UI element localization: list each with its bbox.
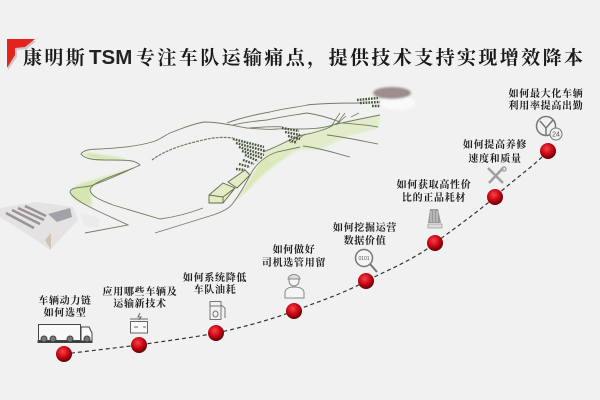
warehouse right <box>373 87 415 110</box>
step 5: data <box>333 221 397 272</box>
step 5: data: 如何挖掘运营 <box>333 221 397 234</box>
step 5: data: 数据价值 <box>344 234 386 247</box>
warehouse left <box>0 202 100 250</box>
icon: truck <box>38 324 92 342</box>
step 2: new technology: 运输新技术 <box>113 297 167 310</box>
dot 4 <box>286 303 302 319</box>
step 2: new technology: 应用哪些车辆及 <box>103 285 177 298</box>
step 7: maintenance: 如何提高养修 <box>463 138 527 151</box>
step 4: drivers <box>262 243 326 298</box>
logo mark <box>7 39 36 70</box>
truck in landscape <box>209 170 250 203</box>
green road shading <box>70 115 380 206</box>
icon: wrench and screwdriver <box>488 167 506 183</box>
step 1: powertrain: 如何选型 <box>44 306 86 319</box>
icon: 24-hour clock: 24 <box>552 132 560 138</box>
dot 8 <box>540 143 556 159</box>
step 8: utilization: 利用率提高出勤 <box>509 99 583 112</box>
icon: driver <box>285 274 304 298</box>
icon: magnifier: 0101 <box>358 256 370 262</box>
step 7: maintenance <box>463 138 527 183</box>
tree clusters <box>233 98 380 170</box>
step 3: fuel: 车队油耗 <box>194 283 236 296</box>
dashed route <box>64 151 548 354</box>
step 6: parts: 比的正品耗材 <box>402 191 466 204</box>
step 6: parts <box>397 178 471 228</box>
step 1: powertrain: 车辆动力链 <box>38 294 92 307</box>
dot 6 <box>427 235 443 251</box>
dot 1 <box>56 346 72 362</box>
landscape: winding road and hills <box>70 103 380 233</box>
icon: fuel pump <box>210 302 225 320</box>
step 3: fuel <box>183 271 247 320</box>
step 3: fuel: 如何系统降低 <box>183 271 247 284</box>
dot 2 <box>131 337 147 353</box>
dot 7 <box>487 189 503 205</box>
step 6: parts: 如何获取高性价 <box>397 178 471 191</box>
road edges <box>70 122 340 233</box>
step 7: maintenance: 速度和质量 <box>468 152 522 165</box>
title: 康明斯 <box>23 46 87 69</box>
step 1: powertrain <box>38 294 92 342</box>
step 8: utilization: 如何最大化车辆 <box>509 87 583 100</box>
step 4: drivers: 司机选管用留 <box>262 256 326 269</box>
step 2: new technology <box>103 285 177 333</box>
dot 3 <box>208 325 224 341</box>
step 4: drivers: 如何做好 <box>273 243 315 256</box>
title: TSM <box>89 46 132 69</box>
icon: battery <box>130 313 148 333</box>
dot 5 <box>358 273 374 289</box>
icon: filter <box>428 209 442 228</box>
title: 专注车队运输痛点，提供技术支持实现增效降本 <box>136 46 585 69</box>
step 8: utilization <box>509 87 583 140</box>
